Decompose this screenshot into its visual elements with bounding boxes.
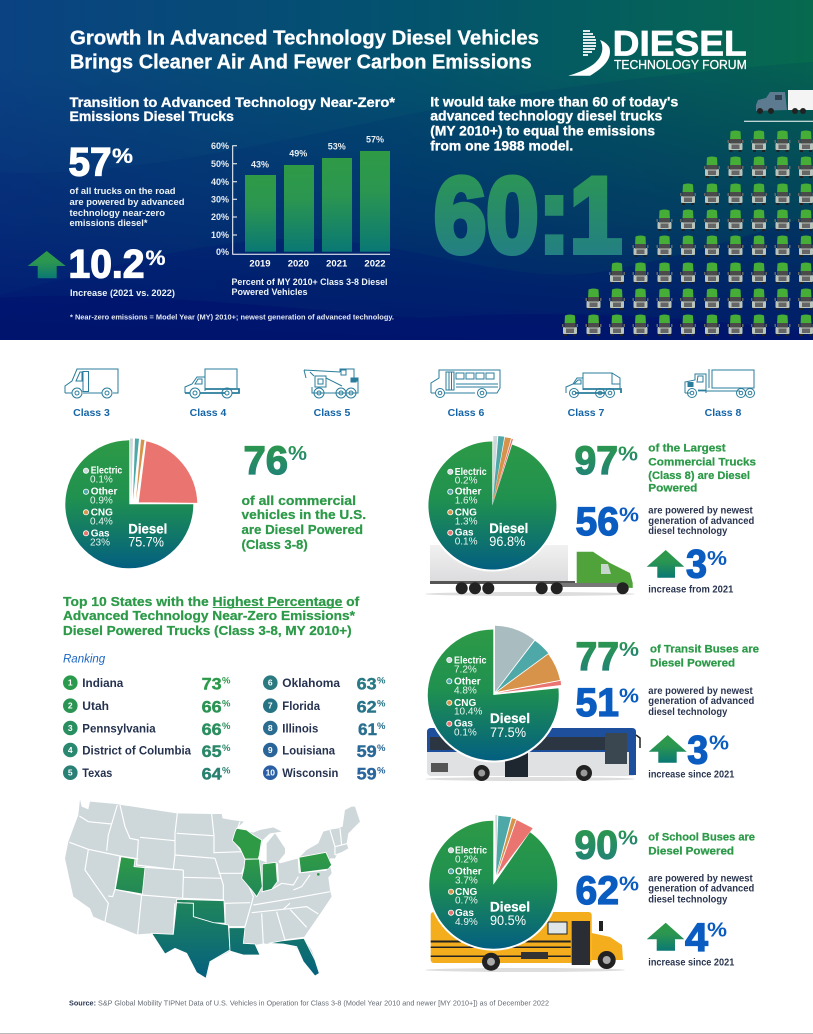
list: state rankings 6 to 10: % <box>377 766 386 776</box>
stat: 3 percent increase from 2021: 3 <box>686 543 707 587</box>
list: state rankings 1 to 5: 73 <box>202 674 222 694</box>
title: Growth In Advanced Technology Diesel Vehicles <box>70 27 539 49</box>
pie chart: all commercial vehicles: Diesel <box>128 521 167 537</box>
bar chart: percent of MY 2010+ vehicles: Percent of MY 2010+ Class 3-8 Diesel <box>232 277 388 288</box>
icon: up arrow transit <box>649 735 687 763</box>
stat: 62 percent newest generation: diesel technology <box>648 895 728 906</box>
pie chart: class 8 trucks: 96.8% <box>489 534 525 549</box>
list: state rankings 6 to 10: Illinois <box>282 721 319 735</box>
stat: 90 percent school buses: of School Buses are <box>648 832 755 844</box>
bar chart: percent of MY 2010+ vehicles: 57% <box>366 135 384 145</box>
icon: class 8 semi truck <box>685 369 754 398</box>
stat: 57 percent: 57 <box>68 141 112 185</box>
image: semi truck <box>425 545 635 596</box>
stat: 97 percent class 8: 97 <box>574 439 618 483</box>
pie chart: all commercial vehicles: CNG <box>91 508 113 519</box>
stat: 56 percent newest generation: % <box>619 505 639 527</box>
stat: 4 percent increase since 2021: increase since 2021 <box>648 958 735 969</box>
stat: 57 percent: of all trucks on the road <box>70 186 176 197</box>
label: class 5: Class 5 <box>314 407 351 419</box>
list: state rankings 1 to 5: 64 <box>202 764 222 784</box>
list: state rankings 6 to 10: 59 <box>357 742 377 761</box>
list: state rankings 6 to 10: % <box>377 743 386 754</box>
bar chart: percent of MY 2010+ vehicles: Powered Vehicles <box>232 287 308 298</box>
list: state rankings 1 to 5: 65 <box>202 742 222 761</box>
list: state rankings 1 to 5: % <box>222 721 231 732</box>
stat: 4 percent increase since 2021 <box>648 916 735 969</box>
pie chart: class 8 trucks: 1.3% <box>455 517 478 528</box>
list: state rankings 1 to 5: Indiana <box>82 676 124 690</box>
pie chart: school buses <box>427 815 559 951</box>
list: state rankings 6 to 10: 10 <box>266 768 275 778</box>
stat: 77 percent transit buses: of Transit Buses are <box>650 644 759 656</box>
list: state rankings 1 to 5: % <box>222 676 231 686</box>
pie chart: class 8 trucks: Electric <box>455 467 487 478</box>
stat: 97 percent class 8: (Class 8) are Diesel <box>648 470 750 482</box>
list: state rankings 6 to 10: 59 <box>357 764 377 784</box>
list: state rankings 6 to 10: % <box>377 676 386 686</box>
stat: 3 percent increase from 2021: % <box>707 548 727 570</box>
stat: 51 percent newest generation: % <box>619 686 639 708</box>
pie chart: school buses: 0.7% <box>455 896 478 907</box>
stat: 51 percent newest generation: are powered by newest <box>648 686 753 697</box>
list: state rankings 1 to 5: 66 <box>202 720 222 739</box>
stat: 51 percent newest generation: 51 <box>576 681 619 725</box>
stat: 76 percent: vehicles in the U.S. <box>242 507 366 522</box>
pie chart: school buses: Gas <box>455 908 474 919</box>
stat: 4 percent increase since 2021: % <box>707 920 727 942</box>
pie chart: all commercial vehicles: Electric <box>91 466 123 477</box>
bar chart: percent of MY 2010+ vehicles <box>211 135 390 298</box>
stat: 56 percent newest generation: are powered by newest <box>648 505 753 516</box>
icon: class 3 van <box>65 369 118 398</box>
stat: 56 percent newest generation: generation of advanced <box>648 516 754 527</box>
hero banner background <box>0 0 813 340</box>
stat: 3 percent increase since 2021 <box>648 728 735 781</box>
list: state rankings 1 to 5: 4 <box>68 745 73 755</box>
stat: 4 percent increase since 2021: 4 <box>685 916 709 960</box>
stat: 77 percent transit buses: Diesel Powered <box>650 658 735 670</box>
list: state rankings 6 to 10 <box>263 674 386 784</box>
source note: Source: S&P Global Mobility TIPNet Data of U.S. Vehicles in Operation for Class 3-8 (Model Year 2010 and newer [MY 2010+]) as of December 2022 <box>69 1001 549 1008</box>
pie chart: class 8 trucks: Other <box>455 487 481 498</box>
list: state rankings 1 to 5: 5 <box>68 768 73 778</box>
pie chart: class 8 trucks: 0.2% <box>455 475 478 486</box>
heading: top 10 states: Diesel Powered Trucks (Class 3-8, MY 2010+) <box>63 623 352 638</box>
stat: 97 percent class 8 <box>574 439 756 495</box>
pie chart: class 8 trucks: 1.6% <box>455 496 478 507</box>
pie chart: all commercial vehicles: 75.7% <box>128 535 164 550</box>
stat: 97 percent class 8: Powered <box>648 483 697 495</box>
stat: 62 percent newest generation: 62 <box>576 869 619 913</box>
list: state rankings 1 to 5: 3 <box>68 723 73 733</box>
stat: 3 percent increase from 2021: increase from 2021 <box>648 585 734 596</box>
pie chart: all commercial vehicles: 23% <box>90 537 110 548</box>
icon: up arrow <box>28 251 66 278</box>
heading: top 10 states: Top 10 States with the Highest Percentage of <box>63 594 360 609</box>
stat: 90 percent school buses: Diesel Powered <box>648 846 734 858</box>
pie chart: class 8 trucks: 0.1% <box>455 537 478 548</box>
list: state rankings 6 to 10: 63 <box>357 674 377 694</box>
label: class 8: Class 8 <box>705 407 742 419</box>
stat: 90 percent school buses: % <box>618 827 638 849</box>
pie chart: transit buses: CNG <box>454 698 476 709</box>
stat: 76 percent: % <box>288 443 307 465</box>
pie chart: school buses: 4.9% <box>455 917 478 928</box>
pie chart: all commercial vehicles <box>65 438 198 568</box>
stat: 90 percent school buses <box>574 823 755 867</box>
pie chart: class 8 trucks: CNG <box>455 508 477 519</box>
logo: Diesel Technology Forum: DIESEL <box>613 25 747 64</box>
bar chart: percent of MY 2010+ vehicles: 30% <box>211 194 229 204</box>
heading: top 10 states: Advanced Technology Near-Zero Emissions* <box>63 608 356 623</box>
pie chart: school buses: CNG <box>455 887 477 898</box>
icon: class 7 truck <box>566 373 621 398</box>
list: state rankings 1 to 5: District of Columbia <box>82 743 191 757</box>
pictogram: 60 modern trucks <box>562 130 813 336</box>
stat: 57 percent: emissions diesel* <box>70 218 148 229</box>
list: state rankings 1 to 5 <box>63 674 231 784</box>
label: ranking: Ranking <box>63 654 106 666</box>
stat: 10.2 percent increase <box>68 243 175 299</box>
list: state rankings 6 to 10: 62 <box>357 698 377 716</box>
list: state rankings 1 to 5: % <box>222 743 231 754</box>
image: transit bus <box>425 728 640 781</box>
pie chart: class 8 trucks: Gas <box>455 528 474 539</box>
statement: 60 trucks to one: advanced technology diesel trucks <box>430 109 662 124</box>
icon: 1988 truck on line <box>744 90 813 121</box>
stat: 56 percent newest generation: diesel technology <box>648 526 728 537</box>
stat: 57 percent: % <box>112 145 133 168</box>
list: state rankings 1 to 5: Pennsylvania <box>82 721 156 735</box>
icon: class 6 shuttle bus <box>431 370 500 398</box>
icon: up arrow class 8 <box>647 550 684 578</box>
pie chart: all commercial vehicles: 0.4% <box>90 516 113 527</box>
subheading: transition <box>70 95 396 124</box>
stat: 90 percent school buses: 90 <box>574 823 618 867</box>
stat: 10.2 percent increase: % <box>146 247 166 270</box>
statement: 60 trucks to one: It would take more than 60 of today's <box>430 95 678 110</box>
logo: Diesel Technology Forum: TECHNOLOGY FORUM <box>614 58 747 72</box>
pie chart: transit buses: 7.2% <box>454 665 477 676</box>
subheading: transition: Emissions Diesel Trucks <box>70 109 234 124</box>
image: school bus <box>425 912 625 972</box>
list: state rankings 1 to 5: Texas <box>82 766 113 780</box>
stat: 77 percent transit buses <box>576 635 759 679</box>
stat: 56 percent newest generation <box>576 500 754 544</box>
bar chart: percent of MY 2010+ vehicles: 43% <box>251 160 269 170</box>
icon: up arrow school <box>647 923 684 951</box>
statement: 60 trucks to one <box>430 95 678 154</box>
pie chart: transit buses: 10.4% <box>454 707 482 718</box>
stat: 97 percent class 8: Commercial Trucks <box>648 457 756 469</box>
pie chart: school buses: Electric <box>455 846 487 857</box>
stat: 56 percent newest generation: 56 <box>576 500 619 544</box>
pie chart: transit buses: Gas <box>454 719 473 730</box>
stat: 76 percent: 76 <box>244 439 288 483</box>
list: state rankings 6 to 10: % <box>377 698 386 710</box>
pie chart: transit buses <box>426 626 561 762</box>
pie chart: transit buses: 4.8% <box>454 686 477 697</box>
stat: 62 percent newest generation: % <box>619 874 639 896</box>
pie chart: class 8 trucks: Diesel <box>489 520 528 536</box>
pie chart: transit buses: 77.5% <box>490 725 526 740</box>
map: United States with top states highlighted <box>65 799 360 978</box>
pie chart: transit buses: Electric <box>454 656 487 667</box>
footnote: near-zero emissions: * Near-zero emissions = Model Year (MY) 2010+; newest generation of advanced technology. <box>70 313 394 322</box>
stat: 51 percent newest generation: generation of advanced <box>648 696 754 707</box>
stat: 57 percent <box>68 141 185 229</box>
pie chart: transit buses: Diesel <box>490 710 530 726</box>
list: state rankings 6 to 10: Wisconsin <box>282 766 338 780</box>
stat: 77 percent transit buses: 77 <box>576 635 619 679</box>
statement: 60 trucks to one: from one 1988 model. <box>430 139 573 154</box>
pie chart: school buses: 90.5% <box>490 913 526 928</box>
label: class 6: Class 6 <box>448 407 485 419</box>
stat: 3 percent increase from 2021 <box>648 543 734 596</box>
bar chart: percent of MY 2010+ vehicles: 49% <box>289 149 307 159</box>
pie chart: transit buses: 0.1% <box>454 728 477 739</box>
bar chart: percent of MY 2010+ vehicles: 20% <box>211 212 229 222</box>
stat: 3 percent increase since 2021: % <box>709 732 729 754</box>
icon: class 4 box truck <box>185 369 239 398</box>
stat: 51 percent newest generation: diesel technology <box>648 707 728 718</box>
stat: 76 percent <box>242 439 366 552</box>
list: state rankings 6 to 10: % <box>377 721 386 732</box>
stat: 62 percent newest generation: generation of advanced <box>648 884 754 895</box>
bar chart: percent of MY 2010+ vehicles: 2021 <box>326 259 348 270</box>
stat: 76 percent: are Diesel Powered <box>242 522 363 537</box>
bar chart: percent of MY 2010+ vehicles: 2022 <box>364 259 386 270</box>
list: state rankings 6 to 10: 9 <box>268 745 273 755</box>
bar chart: percent of MY 2010+ vehicles: 53% <box>328 142 346 152</box>
list: state rankings 6 to 10: 61 <box>358 720 377 739</box>
title: Brings Cleaner Air And Fewer Carbon Emissions <box>70 51 532 73</box>
list: state rankings 1 to 5: 1 <box>68 678 73 688</box>
list: state rankings 6 to 10: Florida <box>282 699 320 713</box>
stat: 57 percent: are powered by advanced <box>70 197 185 208</box>
stat: 57 percent: technology near-zero <box>70 208 165 219</box>
stat: 62 percent newest generation: are powered by newest <box>648 874 753 885</box>
title <box>70 27 539 73</box>
bar chart: percent of MY 2010+ vehicles: 40% <box>211 177 229 187</box>
bar chart: percent of MY 2010+ vehicles: 2020 <box>288 259 309 270</box>
pie chart: all commercial vehicles: 0.1% <box>90 475 113 486</box>
pie chart: all commercial vehicles: Other <box>91 487 117 498</box>
pie chart: school buses: 0.2% <box>455 855 478 866</box>
bar chart: percent of MY 2010+ vehicles: 60% <box>211 141 229 151</box>
stat: 10.2 percent increase: 10.2 <box>68 243 144 287</box>
stat: 10.2 percent increase: Increase (2021 vs. 2022) <box>70 288 175 299</box>
stat: 3 percent increase since 2021: increase since 2021 <box>648 770 735 781</box>
label: class 7: Class 7 <box>568 407 605 419</box>
stat: 51 percent newest generation <box>576 681 754 725</box>
stat: 62 percent newest generation <box>576 869 754 913</box>
pie chart: all commercial vehicles: Gas <box>91 529 110 540</box>
list: state rankings 1 to 5: % <box>222 698 231 710</box>
list: state rankings 6 to 10: 6 <box>268 678 273 688</box>
logo: Diesel Technology Forum <box>568 25 747 76</box>
pie chart: school buses: 3.7% <box>455 876 478 887</box>
bar chart: percent of MY 2010+ vehicles: 0% <box>216 247 229 257</box>
stat: 97 percent class 8: of the Largest <box>648 443 726 455</box>
list: state rankings 1 to 5: Utah <box>82 699 109 713</box>
pie chart: class 8 trucks <box>426 436 558 572</box>
list: state rankings 6 to 10: 7 <box>268 701 273 711</box>
stat: 76 percent: of all commercial <box>242 493 356 508</box>
stat: 76 percent: (Class 3-8) <box>242 537 308 552</box>
bar chart: percent of MY 2010+ vehicles: 10% <box>211 230 229 240</box>
pie chart: school buses: Diesel <box>490 899 530 915</box>
list: state rankings 6 to 10: Oklahoma <box>282 676 340 690</box>
list: state rankings 1 to 5: % <box>222 766 231 776</box>
pie chart: school buses: Other <box>455 867 482 878</box>
bar chart: percent of MY 2010+ vehicles: 50% <box>211 159 229 169</box>
label: class 4: Class 4 <box>190 407 227 419</box>
list: state rankings 1 to 5: 66 <box>202 698 222 716</box>
pie chart: transit buses: Other <box>454 677 481 688</box>
heading: top 10 states <box>63 594 360 638</box>
pie chart: all commercial vehicles: 0.9% <box>90 496 113 507</box>
stat: 97 percent class 8: % <box>618 444 638 466</box>
subheading: transition: Transition to Advanced Technology Near-Zero* <box>70 95 396 110</box>
icon: class 5 crane truck <box>304 369 358 398</box>
list: state rankings 1 to 5: 2 <box>68 701 73 711</box>
statement: 60 trucks to one: (MY 2010+) to equal the emissions <box>430 124 655 139</box>
stat: 77 percent transit buses: % <box>619 639 639 661</box>
stat: 3 percent increase since 2021: 3 <box>687 728 708 772</box>
list: state rankings 6 to 10: Louisiana <box>282 743 335 757</box>
list: state rankings 6 to 10: 8 <box>268 723 273 733</box>
big ratio 60:1: 60:1 <box>434 155 622 275</box>
bar chart: percent of MY 2010+ vehicles: 2019 <box>249 259 271 270</box>
label: class 3: Class 3 <box>73 407 110 419</box>
